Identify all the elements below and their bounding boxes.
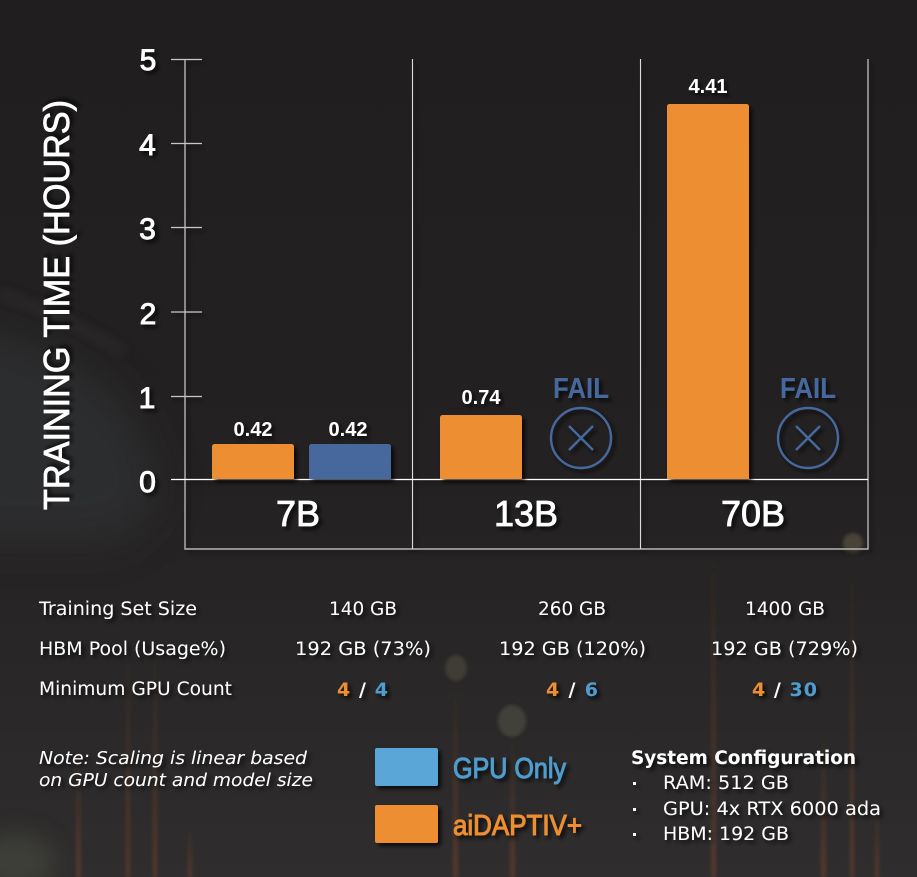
system configuration: GPU: 4x RTX 6000 ada xyxy=(663,799,881,820)
row: training set size: 1400 GB xyxy=(745,599,825,620)
legend item: aiDAPTIV+: aiDAPTIV+ xyxy=(453,810,582,842)
note xyxy=(39,749,313,791)
row: HBM pool usage: HBM Pool (Usage%) xyxy=(39,639,226,660)
y-axis tick labels xyxy=(139,44,156,499)
legend item: GPU only xyxy=(375,748,566,786)
note: Note: Scaling is linear based xyxy=(39,749,308,769)
system configuration xyxy=(631,748,881,845)
data table xyxy=(38,599,858,701)
row: minimum GPU count: 4 / 4 xyxy=(337,679,388,701)
system configuration: System Configuration xyxy=(631,748,856,769)
x-axis category labels: 70B xyxy=(721,493,785,534)
row: training set size xyxy=(38,599,825,620)
y-axis title: TRAINING TIME (HOURS) xyxy=(36,100,77,510)
bar: 13B aiDAPTIV+ 0.74 xyxy=(440,387,522,479)
chart frame and gridlines xyxy=(171,59,868,549)
row: training set size: Training Set Size xyxy=(38,599,197,620)
row: training set size: 260 GB xyxy=(538,599,606,620)
y-axis tick labels: 1 xyxy=(139,382,155,415)
bar chart xyxy=(139,44,868,549)
legend item: GPU only: GPU Only xyxy=(453,753,566,785)
bar: 70B aiDAPTIV+ 4.41 xyxy=(667,76,749,479)
y-axis tick labels: 0 xyxy=(139,466,156,499)
fail marker: 70B GPU only: FAIL xyxy=(780,373,836,405)
bar: 70B aiDAPTIV+ 4.41: 4.41 xyxy=(689,76,727,98)
bar: 7B GPU only 0.42 xyxy=(309,419,391,479)
bar: 7B aiDAPTIV+ 0.42: 0.42 xyxy=(234,419,272,441)
row: HBM pool usage: 192 GB (120%) xyxy=(499,639,646,660)
row: HBM pool usage: 192 GB (73%) xyxy=(295,639,431,660)
fail marker: 70B GPU only xyxy=(778,373,838,468)
fail marker: 13B GPU only: FAIL xyxy=(553,373,609,405)
x-axis category labels xyxy=(276,493,785,534)
bar: 13B aiDAPTIV+ 0.74: 0.74 xyxy=(462,387,501,409)
system configuration: HBM: 192 GB xyxy=(663,824,789,845)
row: minimum GPU count: 4 / 30 xyxy=(752,679,817,701)
y-axis tick labels: 3 xyxy=(139,213,156,246)
x-axis category labels: 7B xyxy=(276,493,320,534)
y-axis tick labels: 4 xyxy=(139,129,156,162)
row: training set size: 140 GB xyxy=(329,599,397,620)
row: minimum GPU count xyxy=(39,679,817,701)
legend xyxy=(375,748,582,843)
y-axis tick labels: 2 xyxy=(140,298,156,331)
row: minimum GPU count: Minimum GPU Count xyxy=(39,679,232,700)
y-axis tick labels: 5 xyxy=(140,44,156,77)
row: minimum GPU count: 4 / 6 xyxy=(546,679,598,701)
legend item: aiDAPTIV+ xyxy=(375,805,582,843)
bar: 7B GPU only 0.42: 0.42 xyxy=(329,419,367,441)
row: HBM pool usage xyxy=(39,639,858,660)
system configuration: RAM: 512 GB xyxy=(663,773,789,794)
bar: 7B aiDAPTIV+ 0.42 xyxy=(212,419,294,479)
x-axis category labels: 13B xyxy=(494,493,558,534)
fail marker: 13B GPU only xyxy=(551,373,611,468)
row: HBM pool usage: 192 GB (729%) xyxy=(711,639,858,660)
note: on GPU count and model size xyxy=(39,771,313,791)
